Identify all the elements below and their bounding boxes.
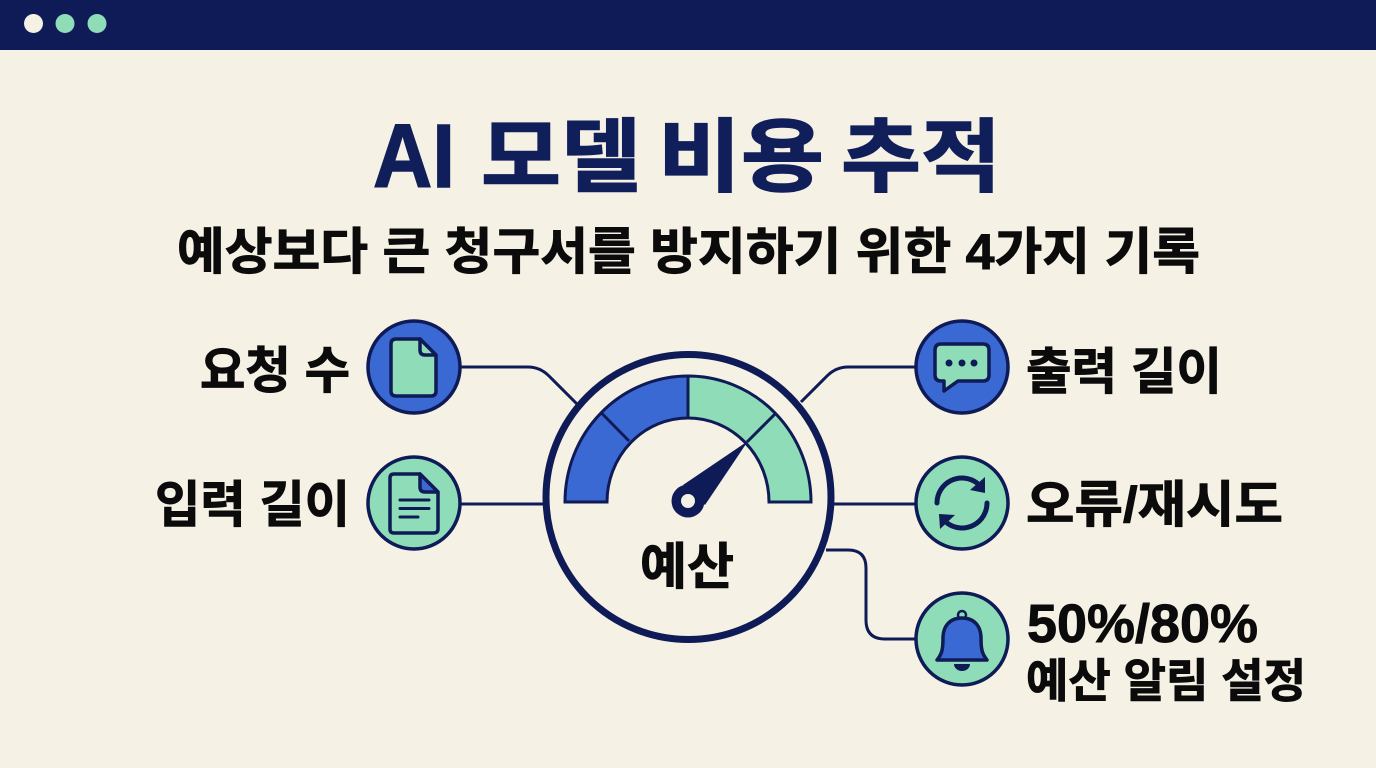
icon: bell xyxy=(916,593,1008,685)
title: 추적 xyxy=(841,113,1001,202)
icon: document xyxy=(368,321,460,413)
gauge segment: blue xyxy=(565,376,688,502)
title: 모델 xyxy=(481,113,641,202)
label: budget alerts: 예산 알림 설정 xyxy=(1026,655,1306,707)
item: input length xyxy=(155,457,460,549)
icon: document with lines xyxy=(368,457,460,549)
item: output length xyxy=(916,321,1222,413)
icon: speech bubble xyxy=(916,321,1008,413)
gauge needle xyxy=(672,441,748,518)
label: output length: 출력 길이 xyxy=(1026,344,1222,400)
item: budget alerts xyxy=(916,593,1306,707)
gauge label: 예산 xyxy=(640,539,734,595)
label: input length: 입력 길이 xyxy=(155,477,350,533)
icon: refresh arrows xyxy=(916,457,1008,549)
title: 비용 xyxy=(658,113,824,202)
budget gauge xyxy=(546,354,831,640)
subtitle: 예상보다 큰 청구서를 방지하기 위한 4가지 기록 xyxy=(177,224,1200,280)
item: request count xyxy=(200,321,460,413)
gauge segment: green xyxy=(688,376,811,502)
item: errors and retries xyxy=(916,457,1283,549)
label: budget alerts: 50%/80% xyxy=(1027,594,1258,654)
label: request count: 요청 수 xyxy=(200,343,350,399)
title xyxy=(373,107,1001,207)
connector lines xyxy=(460,367,916,639)
title: AI xyxy=(373,107,455,207)
label: errors and retries: 오류/재시도 xyxy=(1026,477,1283,533)
label: budget alerts xyxy=(1026,594,1306,707)
top window bar xyxy=(0,0,1376,50)
